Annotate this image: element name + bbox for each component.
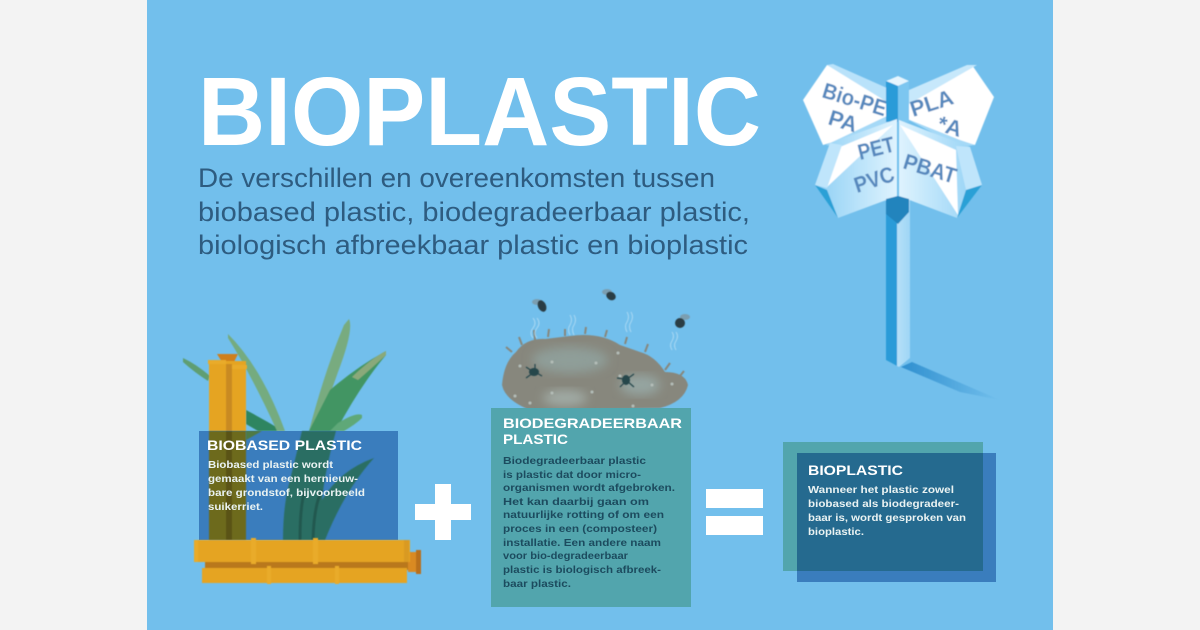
body: biodegradeerbaar plastic: plastic is biologisch afbreek- xyxy=(503,565,661,576)
icon: signpost with plastic types xyxy=(803,64,1000,400)
panel: bioplastic xyxy=(783,442,996,582)
body: biodegradeerbaar plastic: organismen wordt afgebroken. xyxy=(503,483,675,494)
icon: horizontal sugar cane stalks xyxy=(194,538,421,584)
body: biobased plastic: suikerriet. xyxy=(208,502,263,513)
body: biobased plastic: bare grondstof, bijvoorbeeld xyxy=(208,488,365,499)
sign post collar xyxy=(886,196,909,224)
sign: Bio-PE and PA xyxy=(803,64,899,146)
heading: biodegradeerbaar plastic: PLASTIC xyxy=(503,431,568,447)
body: biodegradeerbaar plastic: Het kan daarbij gaan om xyxy=(503,497,649,508)
subtitle: biobased plastic, biodegradeerbaar plastic, xyxy=(198,197,750,227)
panel: biodegradeerbaar plastic xyxy=(491,408,691,607)
sign: PET and PVC xyxy=(815,119,898,218)
sign: PLA: PLA xyxy=(907,84,956,122)
icon: equals sign xyxy=(706,489,763,535)
sign post shadow xyxy=(901,362,1000,400)
icon: sugar cane plant behind panel xyxy=(183,319,386,431)
sign post pole xyxy=(886,198,910,367)
body: biodegradeerbaar plastic: baar plastic. xyxy=(503,579,571,590)
sign: Bio-PE and PA: Bio-PE xyxy=(820,78,890,121)
subtitle: biologisch afbreekbaar plastic en bioplastic xyxy=(198,230,748,260)
body: bioplastic: bioplastic. xyxy=(808,527,864,538)
stalks seen through panel xyxy=(209,431,246,540)
sign: PET and PVC: PVC xyxy=(851,161,898,198)
body: biodegradeerbaar plastic xyxy=(503,456,675,590)
panel: biobased plastic xyxy=(199,431,398,540)
body: bioplastic: baar is, wordt gesproken van xyxy=(808,513,966,524)
body: biobased plastic: gemaakt van een hernieuw- xyxy=(208,474,358,485)
sign: PLA: *A xyxy=(935,111,965,142)
heading: bioplastic: BIOPLASTIC xyxy=(808,462,903,478)
sign: PLA xyxy=(905,65,994,146)
sign post top xyxy=(886,76,909,122)
heading: biobased plastic: BIOBASED PLASTIC xyxy=(207,437,362,453)
icon: vertical sugar cane stalks xyxy=(208,354,247,431)
subtitle xyxy=(198,163,750,260)
subtitle: De verschillen en overeenkomsten tussen xyxy=(198,163,715,193)
flies xyxy=(526,289,690,387)
body: biodegradeerbaar plastic: natuurlijke rotting of om een xyxy=(503,510,664,521)
body: biodegradeerbaar plastic: voor bio-degradeerbaar xyxy=(503,551,628,562)
body: biodegradeerbaar plastic: is plastic dat door micro- xyxy=(503,470,641,481)
body: bioplastic xyxy=(808,485,966,538)
body: biodegradeerbaar plastic: installatie. Een andere naam xyxy=(503,538,661,549)
title: BIOPLASTIC xyxy=(198,57,761,166)
plant seen through panel xyxy=(246,431,374,540)
body: bioplastic: biobased als biodegradeer- xyxy=(808,499,959,510)
heap xyxy=(502,327,688,410)
icon: plus sign xyxy=(415,484,471,540)
body: biodegradeerbaar plastic: Biodegradeerbaar plastic xyxy=(503,456,647,467)
body: bioplastic: Wanneer het plastic zowel xyxy=(808,485,954,496)
sign: PET and PVC: PET xyxy=(855,132,898,165)
icon: compost heap with flies xyxy=(502,289,690,410)
body: biobased plastic xyxy=(208,460,365,513)
steam lines xyxy=(531,312,678,350)
body: biobased plastic: Biobased plastic wordt xyxy=(208,460,334,471)
heading: biodegradeerbaar plastic: BIODEGRADEERBAAR xyxy=(503,415,682,431)
body: biodegradeerbaar plastic: proces in een (composteer) xyxy=(503,524,657,535)
heading: biodegradeerbaar plastic xyxy=(503,415,682,447)
sign: PBAT: PBAT xyxy=(901,149,960,189)
sign: PBAT xyxy=(899,120,982,218)
panel: blue background xyxy=(147,0,1053,630)
sign: Bio-PE and PA: PA xyxy=(826,105,861,137)
